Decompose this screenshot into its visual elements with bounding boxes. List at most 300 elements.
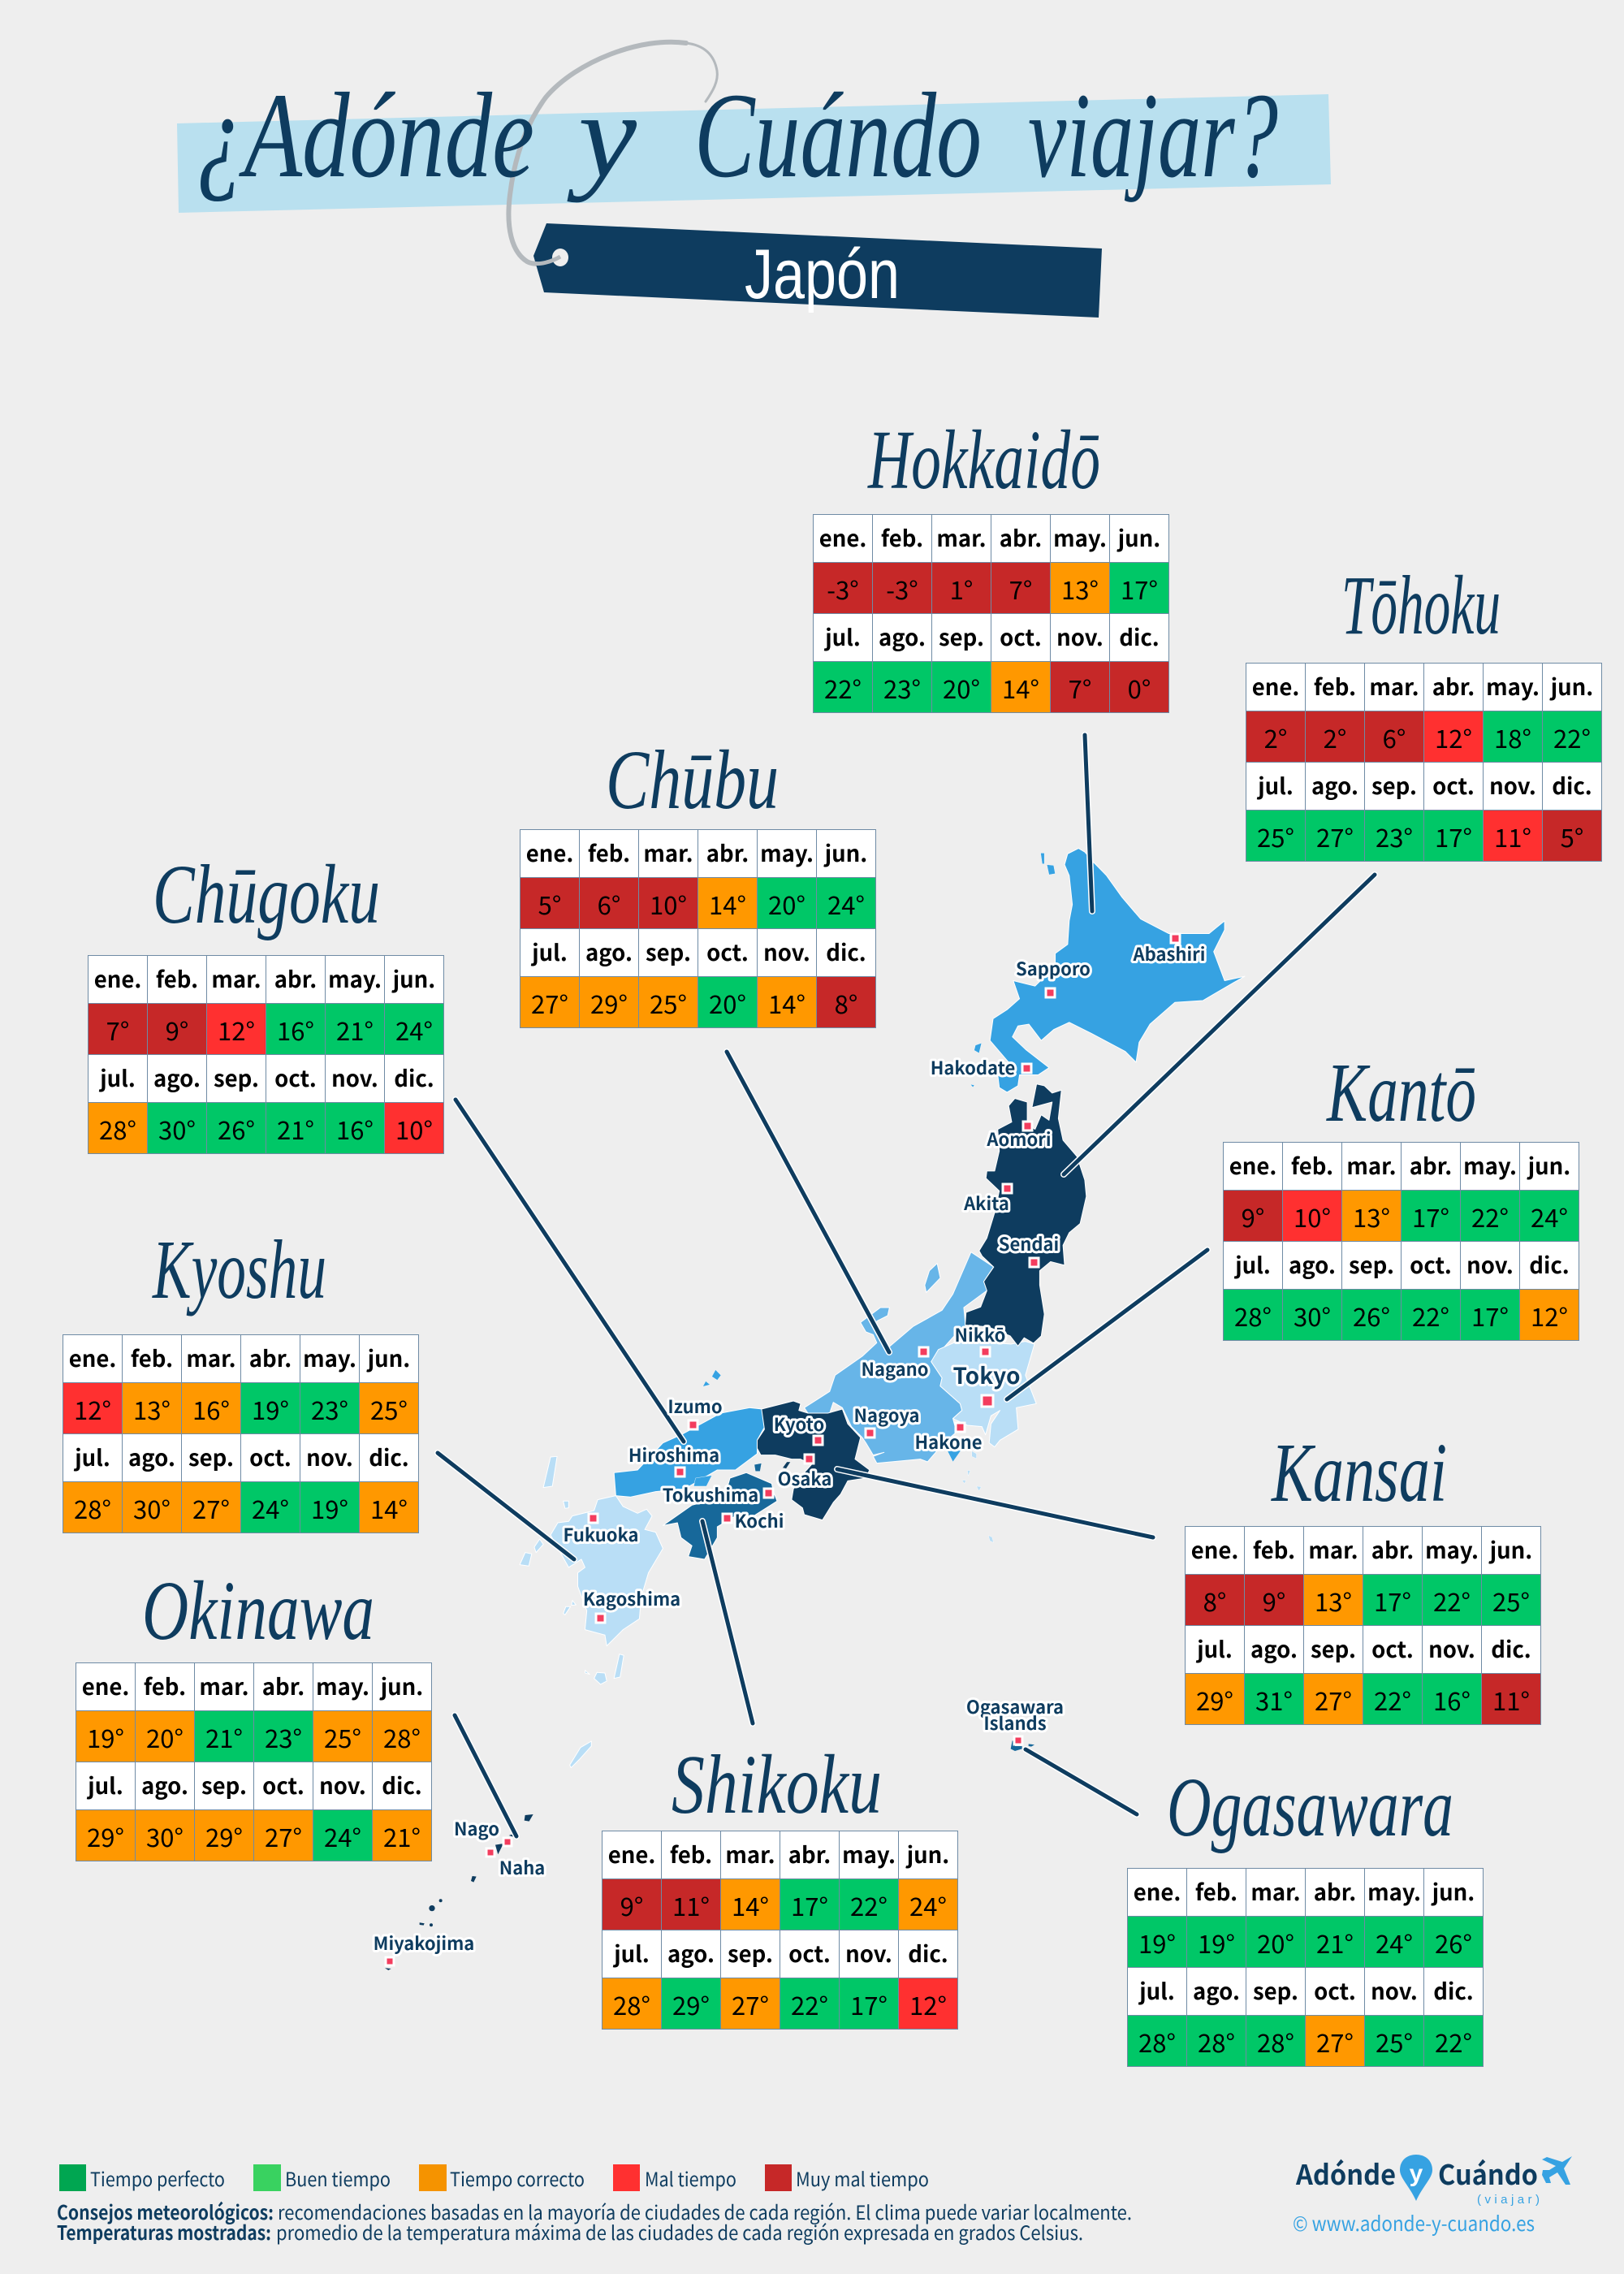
table: Hokkaidō: 20° [943, 669, 980, 705]
table: Tōhoku: jul. [1258, 768, 1294, 801]
table: Tōhoku: 17° [1435, 817, 1472, 854]
table: Kansai: 22° [1433, 1582, 1471, 1618]
table: Chūgoku: may. [328, 962, 382, 994]
table: Hokkaidō: feb. [881, 521, 923, 553]
table: Kantō: 9° [1242, 1197, 1264, 1234]
table: Hokkaidō: abr. [1000, 521, 1042, 553]
table: Chūbu: feb. [588, 836, 630, 868]
city labels: Nago [454, 1815, 499, 1841]
table: Kyoshu: 28° [74, 1489, 111, 1525]
table: Tōhoku: nov. [1489, 768, 1536, 801]
region: Kanto [931, 1340, 1036, 1542]
region: Amami islands [570, 1741, 591, 1768]
logo: (viajar) [1477, 2193, 1540, 2207]
city labels: Kagoshima [583, 1585, 680, 1611]
table: Ogasawara: jun. [1432, 1874, 1475, 1907]
table: Kansai: 11° [1492, 1681, 1530, 1717]
city labels: Sendai [999, 1230, 1059, 1256]
table: Chūbu: ene. [526, 836, 573, 868]
table: Chūbu: sep. [646, 935, 691, 967]
legend: mal tiempo: Mal tiempo [645, 2164, 736, 2192]
table: Kyoshu: 19° [252, 1390, 289, 1426]
table: Okinawa: 28° [383, 1718, 421, 1754]
table: Ogasawara: mar. [1250, 1874, 1301, 1907]
table: Kantō: 30° [1294, 1296, 1331, 1334]
city labels: Hakodate [931, 1054, 1015, 1080]
table: Ogasawara: jul. [1139, 1974, 1175, 2006]
city labels: Tokushima [663, 1481, 758, 1507]
table: Kantō: nov. [1466, 1247, 1514, 1280]
table: Shikoku: jun. [907, 1837, 949, 1870]
table: Shikoku [602, 1831, 958, 2030]
legend: muy mal tiempo: Muy mal tiempo [796, 2164, 929, 2192]
table: Kyoshu: mar. [186, 1341, 236, 1373]
legend: tiempo correcto: Tiempo correcto [450, 2164, 585, 2192]
table: Okinawa: 27° [265, 1818, 302, 1853]
table: Shikoku: 17° [850, 1985, 888, 2022]
table: Okinawa: 29° [205, 1818, 243, 1853]
footnote: consejos meteorológicos: recomendaciones basadas en la mayoría de ciudades de cada región. El clima puede variar localmente. [278, 2197, 1132, 2225]
table: Chūgoku: abr. [274, 962, 317, 994]
table: Kyoshu: 24° [252, 1489, 289, 1525]
table: Hokkaidō: nov. [1056, 620, 1104, 652]
table: Chūgoku [88, 955, 444, 1154]
table: Ogasawara: may. [1367, 1874, 1421, 1907]
country tag [533, 223, 1102, 318]
panel: Kantō [1223, 1046, 1579, 1341]
table: Kansai: 25° [1492, 1582, 1530, 1618]
panel: Ogasawara [1127, 1761, 1484, 2067]
table: Tōhoku: sep. [1371, 768, 1417, 801]
table: Shikoku: ago. [667, 1936, 715, 1969]
table: Tōhoku: feb. [1314, 669, 1356, 702]
table: Hokkaidō: sep. [939, 620, 984, 652]
region: Chubu [805, 1252, 994, 1463]
table: Hokkaidō: 0° [1128, 669, 1151, 705]
table: Okinawa: nov. [319, 1768, 366, 1801]
table: Okinawa: 20° [146, 1718, 184, 1754]
panel: Hokkaidō [813, 413, 1169, 713]
table: Tōhoku: oct. [1432, 768, 1475, 801]
table: Shikoku: 11° [672, 1886, 710, 1923]
heading: Ogasawara: Ogasawara [1167, 1761, 1453, 1854]
table: Hokkaidō: dic. [1119, 620, 1160, 652]
table: Shikoku: ene. [608, 1837, 655, 1870]
table: Chūbu: 14° [709, 885, 746, 921]
table: Kantō: ene. [1229, 1148, 1276, 1181]
table: Ogasawara: 28° [1198, 2022, 1235, 2060]
table: Chūbu: 10° [650, 885, 687, 921]
table: Shikoku: mar. [725, 1837, 775, 1870]
region: Ogasawara [1011, 1740, 1034, 1751]
table: Tōhoku: 18° [1494, 718, 1531, 755]
table: Ogasawara: 22° [1435, 2022, 1472, 2060]
table: Kantō: dic. [1529, 1247, 1570, 1280]
city labels: Kochi [735, 1507, 784, 1533]
table: Okinawa [76, 1662, 432, 1861]
table: Tōhoku: may. [1486, 669, 1540, 702]
icon: map pin [1400, 2155, 1432, 2201]
table: Okinawa: mar. [199, 1669, 249, 1701]
table: Kyoshu: feb. [131, 1341, 173, 1373]
city labels: Kyoto [774, 1411, 824, 1437]
table: Kansai: 13° [1315, 1582, 1352, 1618]
table: Kansai: ene. [1191, 1533, 1238, 1565]
table: Kantō [1223, 1142, 1579, 1341]
region: Tohoku [965, 1084, 1086, 1346]
title: y [567, 68, 637, 203]
table: Chūgoku: jun. [393, 962, 435, 994]
table: Chūgoku: ene. [94, 962, 141, 994]
table: Kyoshu [63, 1334, 419, 1533]
table: Kantō: 10° [1294, 1197, 1331, 1234]
region: Hokkaido [970, 849, 1245, 1092]
table: Kantō: 22° [1471, 1197, 1509, 1234]
table: Shikoku: oct. [788, 1936, 831, 1969]
table: Hokkaidō: 1° [950, 570, 973, 606]
table: Chūgoku: ago. [153, 1061, 201, 1093]
table: Kyoshu: 19° [311, 1489, 348, 1525]
table: Chūgoku: 7° [106, 1010, 129, 1048]
table: Tōhoku: dic. [1552, 768, 1592, 801]
region: Kansai [757, 1401, 870, 1520]
table: Chūgoku: 21° [277, 1109, 314, 1147]
region: Sado island [925, 1264, 940, 1292]
title: Cuándo [694, 68, 982, 203]
table: Kansai [1185, 1526, 1541, 1725]
table: Hokkaidō: 23° [883, 669, 921, 705]
table: Okinawa: 23° [265, 1718, 302, 1754]
city labels: Naha [499, 1854, 545, 1880]
city labels: Nikkō [955, 1321, 1005, 1347]
city markers [386, 934, 1180, 1965]
table: Ogasawara: 26° [1435, 1923, 1472, 1961]
table: Ogasawara: 27° [1316, 2022, 1354, 2060]
table: Kansai: may. [1425, 1533, 1479, 1565]
country tag: Japón [745, 236, 900, 313]
table: Kantō: 12° [1531, 1296, 1568, 1334]
table: Kansai: 17° [1374, 1582, 1411, 1618]
table: Kyoshu: dic. [369, 1440, 409, 1472]
heading: Kyoshu: Kyoshu [152, 1223, 326, 1316]
table: Okinawa: feb. [144, 1669, 186, 1701]
table: Okinawa: ago. [141, 1768, 188, 1801]
title [197, 68, 1278, 203]
table: Kyoshu: 13° [133, 1390, 171, 1426]
table: Tōhoku: ene. [1252, 669, 1299, 702]
table: Shikoku: abr. [788, 1837, 831, 1870]
table: Chūgoku: 9° [166, 1010, 188, 1048]
table: Hokkaidō: 7° [1009, 570, 1032, 606]
logo: © www.adonde-y-cuando.es [1293, 2208, 1535, 2237]
city labels: Tokyo [953, 1359, 1020, 1391]
table: Chūgoku: dic. [394, 1061, 434, 1093]
table: Tōhoku: abr. [1432, 669, 1475, 702]
city labels: Nagano [861, 1355, 929, 1381]
table: Kantō: 28° [1234, 1296, 1272, 1334]
table: Chūgoku: 10° [395, 1109, 433, 1147]
table: Tōhoku: 6° [1383, 718, 1406, 755]
table: Kyoshu: 14° [370, 1489, 408, 1525]
region: Kyushu [520, 1456, 663, 1684]
table: Okinawa: may. [316, 1669, 369, 1701]
table: Kantō: ago. [1289, 1247, 1336, 1280]
table: Hokkaidō: jul. [825, 620, 861, 652]
table: Ogasawara: dic. [1433, 1974, 1474, 2006]
table: Chūbu: 29° [590, 984, 628, 1020]
table: Ogasawara [1127, 1868, 1484, 2067]
table: Chūbu: 25° [650, 984, 687, 1020]
heading: Tōhoku: Tōhoku [1341, 559, 1501, 652]
table: Kansai: ago. [1250, 1632, 1298, 1664]
table: Kantō: 24° [1531, 1197, 1568, 1234]
table: Kyoshu: may. [303, 1341, 356, 1373]
city labels: Hakone [915, 1429, 982, 1455]
table: Ogasawara: oct. [1314, 1974, 1356, 2006]
table: Okinawa: 24° [324, 1818, 361, 1853]
table: Kyoshu: 30° [133, 1489, 171, 1525]
table: Ogasawara: 19° [1198, 1923, 1235, 1961]
city labels: Miyakojima [374, 1930, 474, 1956]
heading: Kantō: Kantō [1326, 1046, 1476, 1139]
table: Chūgoku: 21° [336, 1010, 374, 1048]
table: Kyoshu: ene. [69, 1341, 116, 1373]
city labels: Sapporo [1016, 955, 1091, 981]
table: Shikoku: nov. [845, 1936, 892, 1969]
table: Chūgoku: jul. [100, 1061, 136, 1093]
table: Chūbu [520, 829, 876, 1028]
table: Kantō: abr. [1410, 1148, 1452, 1181]
city labels: Nagoya [854, 1402, 919, 1428]
table: Hokkaidō: oct. [1000, 620, 1042, 652]
table: Shikoku: 17° [791, 1886, 828, 1923]
table: Chūbu: 5° [538, 885, 561, 921]
table: Hokkaidō: ago. [879, 620, 926, 652]
table: Chūbu: 14° [768, 984, 806, 1020]
panel: Shikoku [602, 1738, 958, 2030]
region: Chugoku [614, 1370, 767, 1497]
table: Hokkaidō: mar. [936, 521, 987, 553]
table: Ogasawara: ene. [1134, 1874, 1181, 1907]
table: Chūbu: 27° [531, 984, 568, 1020]
region: Okinawa [385, 1814, 533, 1970]
city labels: Osaka [778, 1465, 831, 1491]
table: Okinawa: 21° [205, 1718, 243, 1754]
table: Hokkaidō: -3° [827, 570, 859, 606]
table: Ogasawara: 28° [1257, 2022, 1294, 2060]
table: Okinawa: 29° [87, 1818, 124, 1853]
table: Kantō: 22° [1412, 1296, 1449, 1334]
footnote: temperaturas mostradas: Temperaturas mostradas: [57, 2217, 271, 2246]
tag string [508, 42, 717, 264]
table: Kansai: feb. [1253, 1533, 1295, 1565]
table: Kansai: sep. [1311, 1632, 1356, 1664]
table: Chūgoku: oct. [274, 1061, 317, 1093]
city labels: Islands [983, 1710, 1047, 1736]
table: Okinawa: 21° [383, 1818, 421, 1853]
table: Kantō: 17° [1471, 1296, 1509, 1334]
table: Ogasawara: 20° [1257, 1923, 1294, 1961]
table: Kansai: 22° [1374, 1681, 1411, 1717]
map of Japan [385, 849, 1245, 1970]
table: Kantō: 26° [1353, 1296, 1390, 1334]
table: Chūgoku: 24° [395, 1010, 433, 1048]
table: Okinawa: oct. [262, 1768, 304, 1801]
panel: Tōhoku [1246, 559, 1602, 862]
table: Chūbu: abr. [706, 836, 749, 868]
table: Okinawa: ene. [82, 1669, 129, 1701]
table: Ogasawara: ago. [1193, 1974, 1240, 2006]
table: Tōhoku: 5° [1561, 817, 1583, 854]
table: Shikoku: 27° [732, 1985, 769, 2022]
heading: Hokkaidō: Hokkaidō [867, 413, 1100, 507]
table: Chūbu: mar. [643, 836, 693, 868]
connector lines [438, 735, 1375, 1836]
table: Okinawa: dic. [382, 1768, 422, 1801]
table: Hokkaidō: ene. [819, 521, 866, 553]
logo: Cuándo [1438, 2153, 1538, 2193]
table: Shikoku: feb. [670, 1837, 712, 1870]
legend: buen tiempo: Buen tiempo [285, 2164, 391, 2192]
table: Kansai: 29° [1196, 1681, 1233, 1717]
table: Hokkaidō: 13° [1061, 570, 1099, 606]
table: Chūbu: 6° [598, 885, 620, 921]
table: Shikoku: sep. [728, 1936, 773, 1969]
table: Shikoku: 22° [791, 1985, 828, 2022]
table: Shikoku: 12° [909, 1985, 947, 2022]
table: Chūbu: jul. [532, 935, 568, 967]
table: Kansai: abr. [1371, 1533, 1414, 1565]
table: Ogasawara: 24° [1376, 1923, 1413, 1961]
table: Shikoku: 14° [732, 1886, 769, 1923]
table: Tōhoku [1246, 663, 1602, 862]
city labels: Aomori [986, 1126, 1052, 1152]
city labels: Izumo [667, 1393, 723, 1419]
table: Tōhoku: 22° [1553, 718, 1591, 755]
panel: Okinawa [76, 1564, 432, 1861]
logo: y [1410, 2160, 1423, 2187]
table: Hokkaidō: 7° [1069, 669, 1091, 705]
table: Chūbu: dic. [826, 935, 866, 967]
title: viajar? [1028, 68, 1278, 203]
table: Kantō: 13° [1353, 1197, 1390, 1234]
table: Shikoku: 24° [909, 1886, 947, 1923]
title: ¿Adónde [197, 68, 534, 203]
city labels: Hiroshima [628, 1442, 719, 1468]
legend: tiempo perfecto: Tiempo perfecto [90, 2164, 225, 2192]
table: Okinawa: jun. [381, 1669, 423, 1701]
logo: Adónde [1295, 2153, 1396, 2193]
legend [59, 2164, 929, 2192]
table: Chūbu: nov. [763, 935, 810, 967]
table: Kantō: sep. [1349, 1247, 1394, 1280]
table: Tōhoku: 23° [1376, 817, 1413, 854]
table: Shikoku: 28° [613, 1985, 650, 2022]
table: Kyoshu: abr. [249, 1341, 292, 1373]
legend: mal tiempo [613, 2164, 736, 2192]
table: Hokkaidō: -3° [886, 570, 918, 606]
table: Ogasawara: nov. [1371, 1974, 1418, 2006]
table: Kansai: jul. [1197, 1632, 1233, 1664]
table: Kansai: oct. [1371, 1632, 1414, 1664]
table: Kyoshu: oct. [249, 1440, 292, 1472]
table: Kyoshu: 12° [74, 1390, 111, 1426]
city labels: Akita [963, 1190, 1009, 1216]
city labels: Ogasawara [966, 1693, 1064, 1719]
table: Tōhoku: mar. [1369, 669, 1419, 702]
table: Hokkaidō: jun. [1118, 521, 1160, 553]
table: Ogasawara: 28° [1138, 2022, 1176, 2060]
table: Kansai: 16° [1433, 1681, 1471, 1717]
table: Chūgoku: 28° [99, 1109, 136, 1147]
table: Okinawa: 30° [146, 1818, 184, 1853]
table: Kansai: jun. [1490, 1533, 1532, 1565]
table: Shikoku: may. [842, 1837, 896, 1870]
heading: Chūbu: Chūbu [606, 733, 779, 827]
footnote: temperaturas mostradas: promedio de la temperatura máxima de las ciudades de cada región expresada en grados Celsius. [276, 2217, 1083, 2246]
panel: Chūgoku [88, 848, 444, 1154]
heading: Okinawa: Okinawa [142, 1564, 374, 1658]
table: Kantō: oct. [1410, 1247, 1452, 1280]
panel: Chūbu [520, 733, 876, 1028]
table: Kansai: 31° [1255, 1681, 1293, 1717]
table: Chūbu: ago. [585, 935, 633, 967]
heading: Kansai: Kansai [1271, 1426, 1447, 1520]
table: Ogasawara: feb. [1195, 1874, 1237, 1907]
table: Chūbu: 20° [709, 984, 746, 1020]
table: Kyoshu: ago. [128, 1440, 175, 1472]
table: Kantō: may. [1463, 1148, 1517, 1181]
table: Kantō: feb. [1291, 1148, 1333, 1181]
table: Okinawa: 25° [324, 1718, 361, 1754]
icon: plane [1542, 2156, 1572, 2185]
logo [1293, 2153, 1572, 2237]
table: Kyoshu: sep. [188, 1440, 234, 1472]
table: Chūgoku: 30° [158, 1109, 196, 1147]
table: Tōhoku: 2° [1324, 718, 1346, 755]
table: Kyoshu: jun. [368, 1341, 410, 1373]
table: Shikoku: 29° [672, 1985, 710, 2022]
table: Shikoku: jul. [614, 1936, 650, 1969]
panel: Kansai [1185, 1426, 1541, 1725]
table: Hokkaidō: 22° [824, 669, 862, 705]
table: Hokkaidō: 14° [1002, 669, 1039, 705]
panel: Kyoshu [63, 1223, 419, 1533]
table: Okinawa: 19° [87, 1718, 124, 1754]
table: Tōhoku: 27° [1316, 817, 1354, 854]
table: Ogasawara: abr. [1314, 1874, 1356, 1907]
city labels: Fukuoka [563, 1521, 639, 1547]
heading: Shikoku: Shikoku [672, 1738, 882, 1831]
table: Kansai: mar. [1308, 1533, 1358, 1565]
table: Chūbu: jun. [825, 836, 867, 868]
table: Tōhoku: 2° [1264, 718, 1287, 755]
table: Ogasawara: 25° [1376, 2022, 1413, 2060]
table: Tōhoku: jun. [1551, 669, 1593, 702]
footnote: consejos meteorológicos: Consejos meteorológicos: [57, 2197, 274, 2225]
table: Kantō: jul. [1235, 1247, 1271, 1280]
title band [177, 94, 1331, 213]
table: Chūgoku: 16° [336, 1109, 374, 1147]
table: Kyoshu: 23° [311, 1390, 348, 1426]
table: Chūgoku: feb. [156, 962, 198, 994]
table: Kansai: 8° [1203, 1582, 1226, 1618]
table: Tōhoku: ago. [1311, 768, 1358, 801]
table: Chūgoku: 26° [218, 1109, 255, 1147]
table: Ogasawara: 19° [1138, 1923, 1176, 1961]
table: Kyoshu: 27° [192, 1489, 230, 1525]
table: Kyoshu: 16° [192, 1390, 230, 1426]
